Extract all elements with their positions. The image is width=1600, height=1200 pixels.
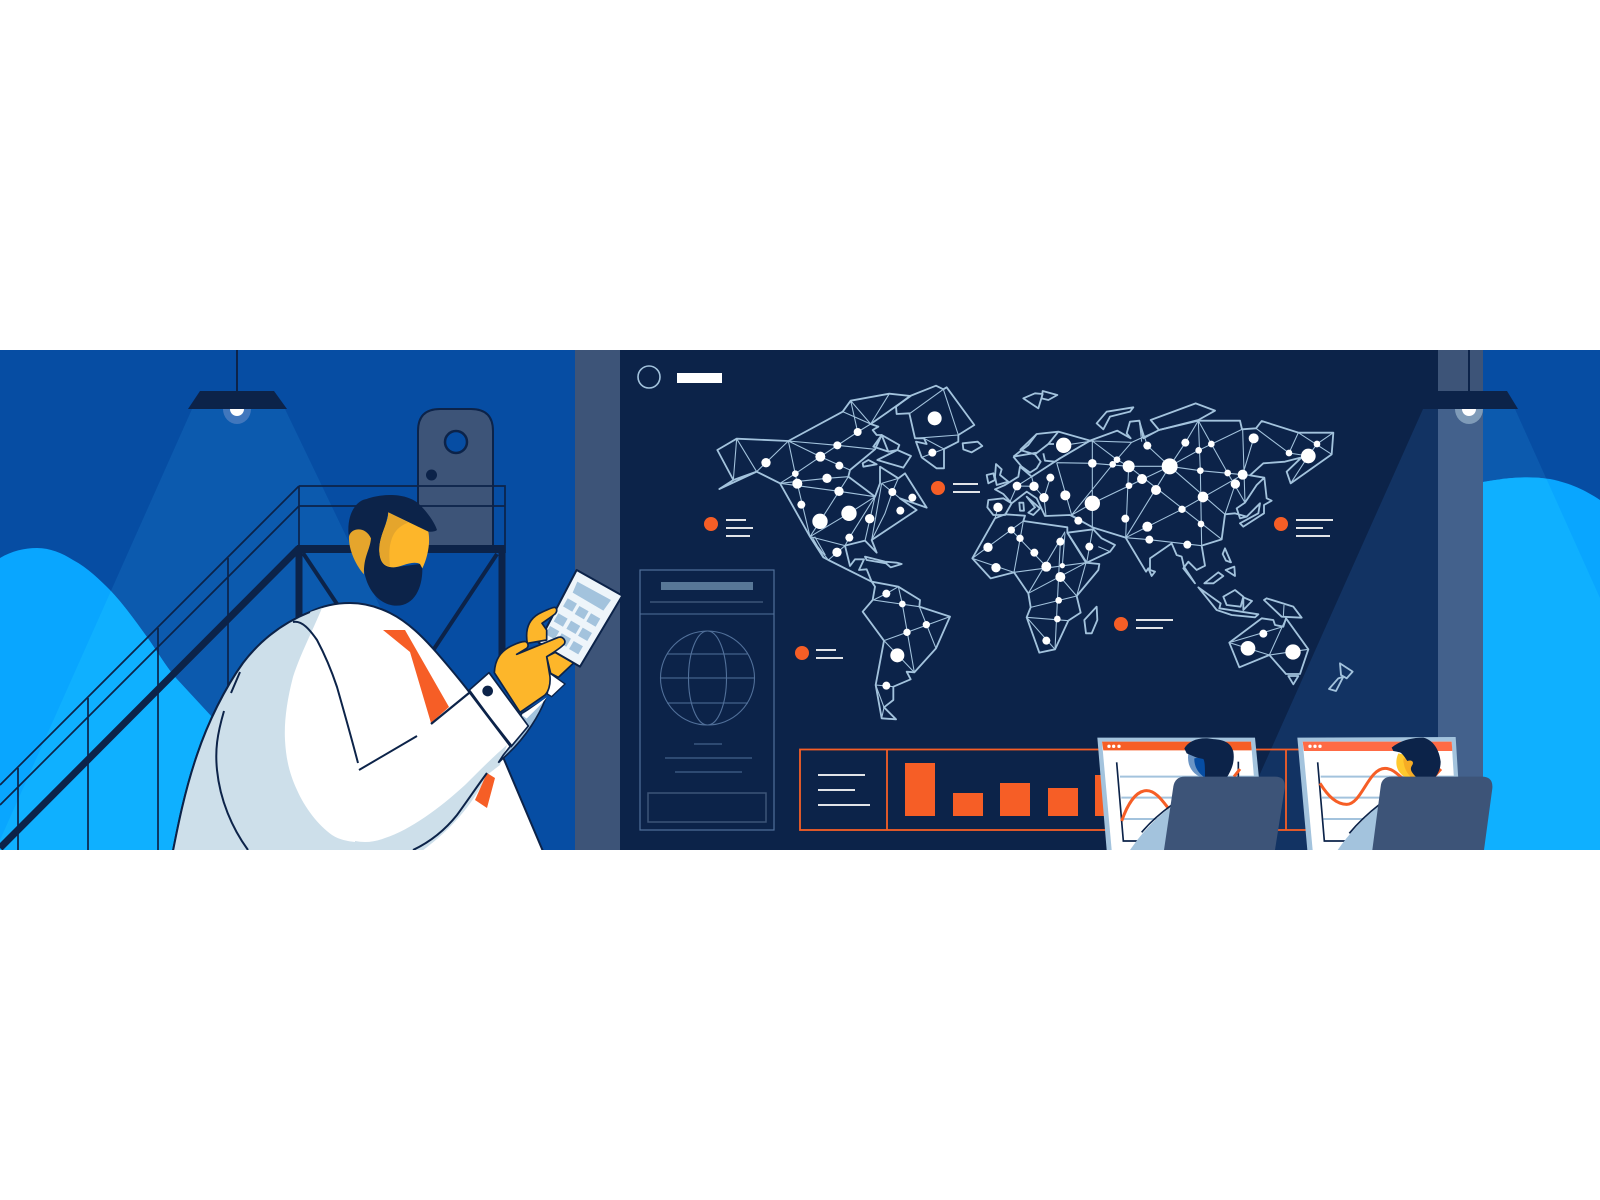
shirt cuff bbox=[469, 673, 528, 747]
background wall right bbox=[1483, 350, 1600, 500]
calculator bbox=[539, 570, 622, 667]
monitor 1 and operator bbox=[1097, 738, 1285, 850]
thumb bbox=[527, 607, 557, 643]
left lamp bbox=[188, 350, 287, 424]
face shadow bbox=[379, 512, 408, 566]
legend: north atlantic bbox=[931, 481, 980, 495]
legend markers bbox=[704, 481, 1333, 660]
face bbox=[379, 512, 429, 568]
coat shading bbox=[172, 608, 355, 856]
legend: east asia bbox=[1274, 517, 1333, 536]
left hill bbox=[0, 548, 211, 840]
coat detail lines bbox=[216, 622, 487, 850]
legend: indian ocean bbox=[1114, 617, 1173, 631]
light cone on right hill bbox=[1483, 477, 1600, 850]
staircase and platform bbox=[0, 486, 505, 850]
tie upper piece bbox=[383, 630, 449, 723]
Americas coastlines bbox=[717, 386, 982, 719]
coat lower shading band bbox=[355, 745, 507, 856]
Eastern hemisphere city dots bbox=[983, 433, 1320, 660]
hair and beard bbox=[348, 495, 437, 606]
light cone on right wall bbox=[1483, 409, 1546, 482]
dark screen wall bbox=[620, 350, 1438, 850]
map: Eurasia, Africa and Oceania bbox=[972, 391, 1353, 691]
map: Americas and Greenland bbox=[717, 386, 982, 719]
lower fingers bbox=[547, 652, 574, 677]
bottom bar chart panel bbox=[800, 749, 1340, 830]
monitor 2 and operator bbox=[1297, 737, 1492, 850]
Eastern hemisphere coastlines bbox=[972, 391, 1353, 691]
light cone on screen wall bbox=[1259, 409, 1438, 850]
main character: head, hands and calculator bbox=[348, 495, 622, 763]
legend: north pacific bbox=[704, 517, 753, 536]
coat outline over shading bbox=[172, 612, 310, 856]
tie lower piece bbox=[475, 773, 495, 808]
right lamp bbox=[1438, 350, 1518, 424]
right pillar bbox=[1438, 350, 1483, 391]
right hill bbox=[1484, 477, 1600, 598]
main character: coat bbox=[172, 603, 545, 856]
side panel with globe bbox=[640, 570, 774, 830]
Americas city dots bbox=[761, 411, 942, 690]
light cone left bbox=[111, 409, 380, 716]
inner sleeve bbox=[498, 700, 545, 763]
legend: south pacific bbox=[795, 646, 843, 660]
ear bbox=[349, 529, 371, 574]
shirt sliver bbox=[522, 697, 547, 719]
title bar bbox=[677, 373, 722, 383]
background wall left bbox=[0, 350, 575, 850]
pointing hand bbox=[494, 637, 565, 712]
door bbox=[418, 409, 493, 546]
bars bbox=[905, 763, 1125, 816]
Americas mesh lines bbox=[733, 389, 958, 718]
light cone on right pillar bbox=[1438, 409, 1483, 776]
Eastern hemisphere mesh lines bbox=[972, 421, 1333, 655]
illustration band bbox=[0, 350, 1600, 856]
back cuff bbox=[547, 673, 565, 697]
light cone on left hill bbox=[0, 591, 212, 850]
left pillar bbox=[575, 350, 620, 850]
logo circle bbox=[638, 366, 660, 388]
